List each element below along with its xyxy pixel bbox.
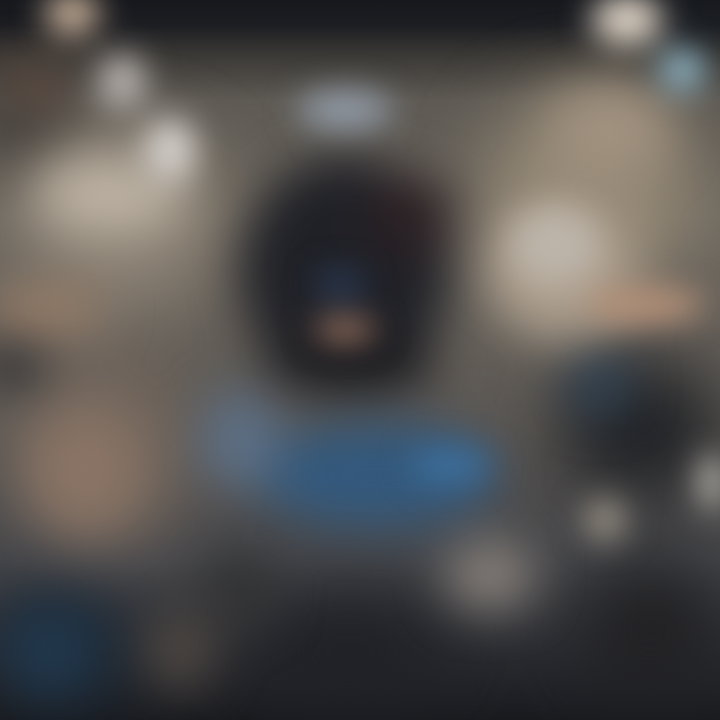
soft highlights [44,0,720,542]
